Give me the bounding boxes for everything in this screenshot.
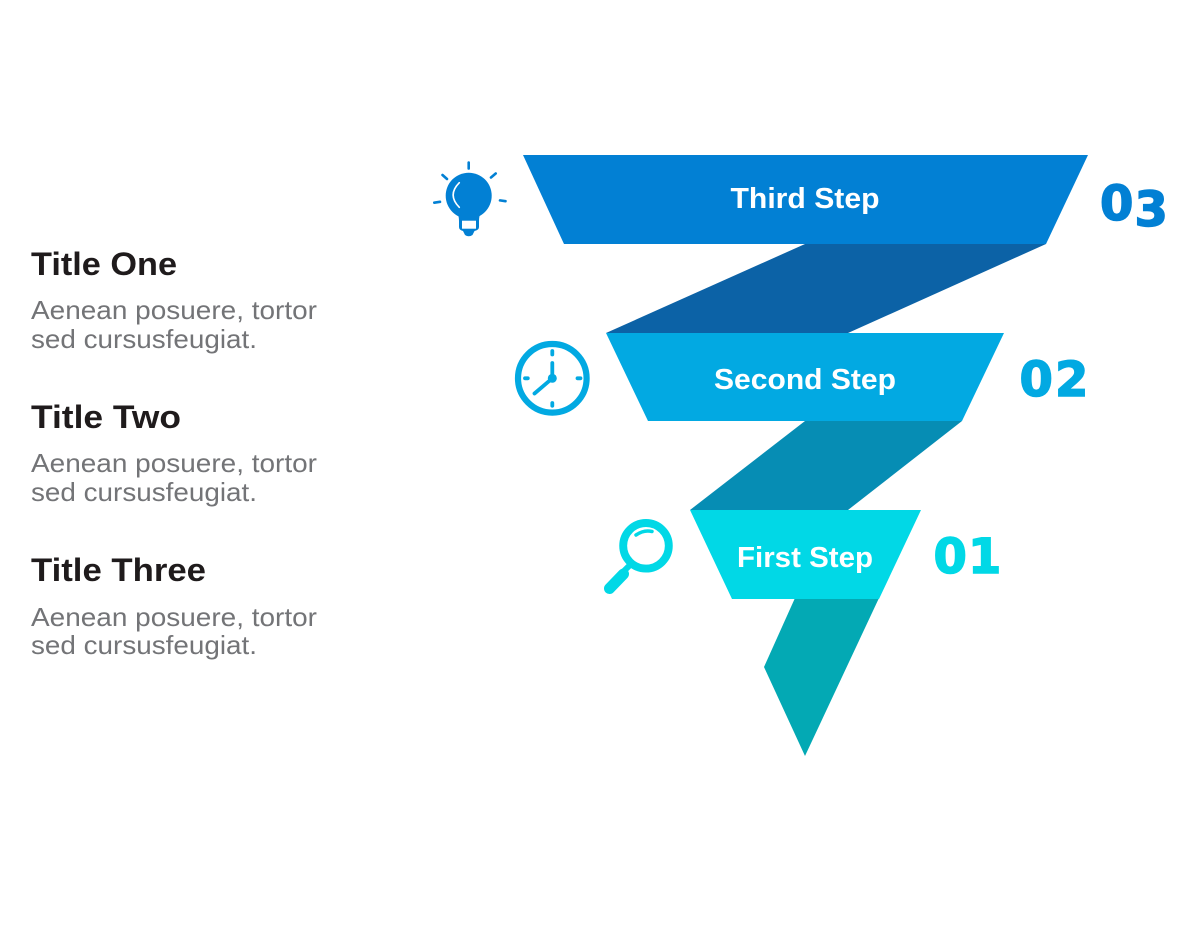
funnel band: first step	[690, 510, 921, 599]
text block: title one: sed cursusfeugiat.	[31, 324, 257, 354]
number 03: 03	[1100, 176, 1168, 238]
text block: title three: Title Three	[31, 552, 206, 588]
funnel connector: second to first	[690, 421, 962, 510]
icon: magnifying glass	[610, 523, 669, 588]
funnel band: third step	[523, 155, 1088, 244]
funnel band: second step: Second Step	[714, 364, 896, 396]
number 01: 01	[934, 529, 1001, 585]
text block: title three	[31, 552, 317, 660]
number 02: 02	[1020, 352, 1088, 408]
text block: title three: sed cursusfeugiat.	[31, 630, 257, 660]
funnel connector: third to second	[606, 244, 1046, 333]
text block: title one: Aenean posuere, tortor	[31, 295, 317, 325]
funnel tail	[764, 598, 879, 756]
text block: title two	[31, 399, 317, 507]
funnel band: second step	[606, 333, 1004, 421]
icon: light bulb	[434, 162, 506, 236]
text block: title one	[31, 246, 317, 354]
text block: title two: Aenean posuere, tortor	[31, 448, 317, 478]
text block: title three: Aenean posuere, tortor	[31, 602, 317, 632]
text block: title two: Title Two	[31, 399, 181, 435]
funnel band: third step: Third Step	[730, 183, 880, 215]
funnel band: first step: First Step	[737, 542, 873, 574]
icon: clock	[518, 344, 587, 413]
text block: title one: Title One	[31, 246, 177, 282]
text block: title two: sed cursusfeugiat.	[31, 477, 257, 507]
